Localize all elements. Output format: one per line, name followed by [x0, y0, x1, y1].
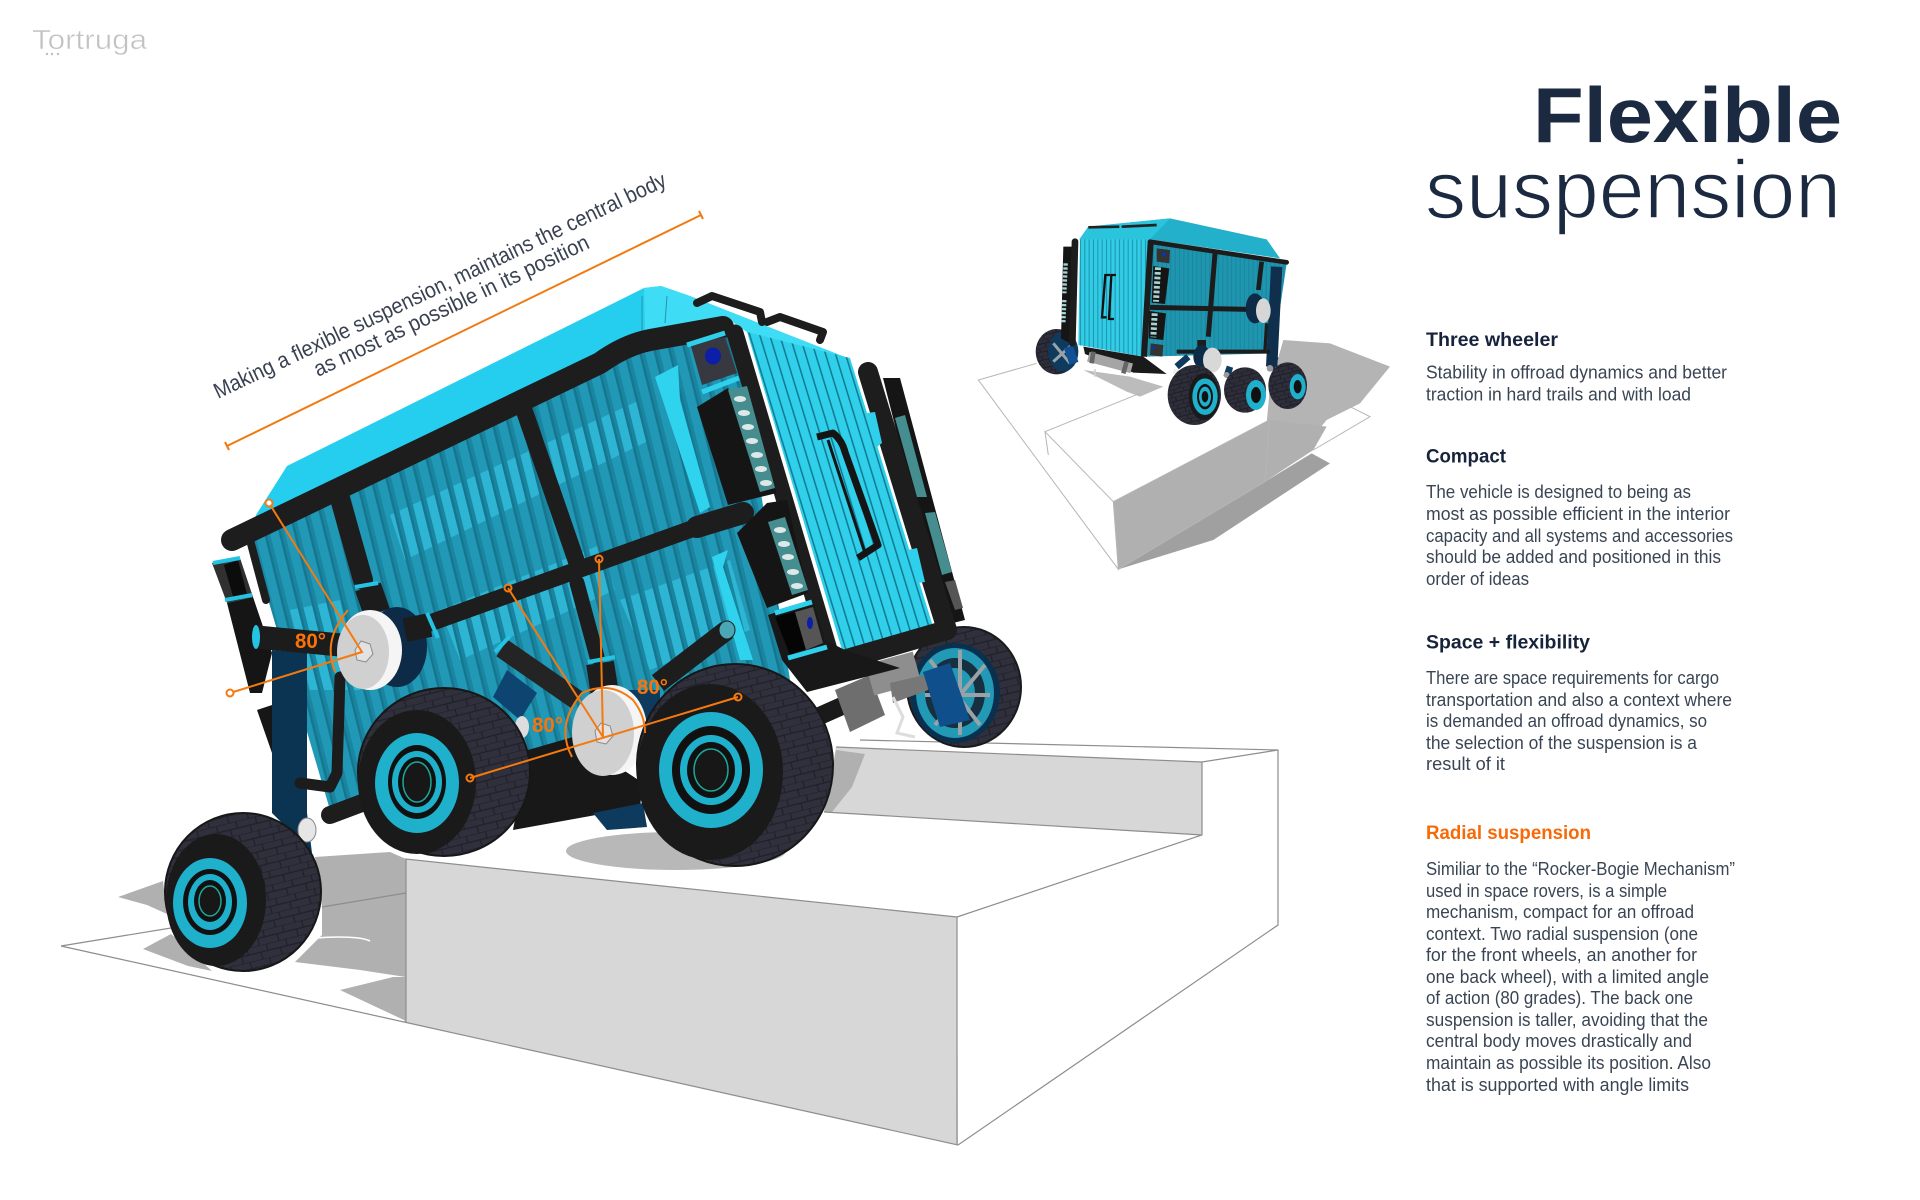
far side LED bars and tube: [867, 372, 965, 630]
text block: space + flexibility: result of it: [1426, 754, 1505, 774]
angle labels: 80°: [637, 676, 668, 699]
title: [1425, 71, 1842, 236]
roof: [250, 286, 850, 540]
text block: compact: capacity and all systems and accessories: [1426, 526, 1733, 546]
frame rails: [232, 327, 947, 815]
arrow: orange measure line: [225, 211, 703, 450]
text block: three wheeler: [1426, 329, 1727, 404]
callout: rotated caption: Making a flexible suspension, maintains the central body: [209, 167, 670, 404]
hubs: [1173, 293, 1275, 378]
text block: compact: should be added and positioned in this: [1426, 547, 1721, 567]
winch: [1083, 347, 1167, 377]
text block: radial suspension: of action (80 grades). The back one: [1426, 988, 1693, 1008]
text block: space + flexibility: is demanded an offroad dynamics, so: [1426, 711, 1707, 731]
text block: radial suspension: suspension is taller, avoiding that the: [1426, 1010, 1708, 1030]
logo: Tortruga: Tortruga: [32, 24, 147, 55]
text block: three wheeler: Three wheeler: [1426, 329, 1558, 351]
chart: stepped ground platform: [61, 740, 1278, 1145]
front wheel: [637, 664, 833, 866]
text block: radial suspension: maintain as possible its position. Also: [1426, 1053, 1711, 1073]
text block: three wheeler: Stability in offroad dynamics and better: [1426, 362, 1727, 382]
end panel with ribs: [747, 332, 935, 660]
rear radial suspension hub: [252, 583, 438, 690]
text block: compact: order of ideas: [1426, 569, 1529, 589]
text block: radial suspension: for the front wheels, an another for: [1426, 945, 1697, 965]
wheels: [1168, 362, 1307, 425]
text block: three wheeler: traction in hard trails and with load: [1426, 384, 1691, 404]
far side lights: [1061, 242, 1075, 343]
text block: compact: [1426, 446, 1733, 589]
icon: small vehicle: [1036, 218, 1307, 425]
title: Flexible: [1533, 71, 1842, 159]
title: suspension: [1425, 143, 1841, 236]
text block: compact: Compact: [1426, 446, 1506, 468]
icon: small vehicle steps: [978, 340, 1390, 569]
text block: radial suspension: mechanism, compact for an offroad: [1426, 902, 1694, 922]
icon: main vehicle: [165, 286, 1021, 971]
text block: space + flexibility: the selection of the suspension is a: [1426, 733, 1698, 753]
LED light bars: [687, 333, 900, 692]
rear right wheel and winch: [815, 627, 1021, 747]
left camera box and leg: [212, 558, 340, 853]
text block: space + flexibility: There are space requirements for cargo: [1426, 668, 1719, 688]
text block: compact: most as possible efficient in the interior: [1426, 504, 1730, 524]
angle labels: [295, 630, 668, 737]
callout: rotated caption: as most as possible in its position: [309, 229, 593, 382]
mid wheel: [358, 688, 530, 856]
angle guides: [226, 500, 742, 782]
side panel with ribs: [250, 325, 790, 810]
angle labels: 80°: [295, 630, 326, 653]
lower left wheel: [165, 813, 321, 971]
text block: space + flexibility: Space + flexibility: [1426, 632, 1590, 654]
front suspension arms and chassis: [493, 621, 735, 830]
text block: space + flexibility: [1426, 632, 1732, 774]
rear wheel: [1036, 329, 1078, 374]
body: [1078, 218, 1287, 367]
text block: radial suspension: used in space rovers, is a simple: [1426, 881, 1667, 901]
text block: radial suspension: one back wheel), with a limited angle: [1426, 967, 1709, 987]
text block: radial suspension: that is supported with angle limits: [1426, 1075, 1689, 1095]
text block: space + flexibility: transportation and also a context where: [1426, 690, 1732, 710]
text block: radial suspension: [1426, 822, 1735, 1095]
text block: radial suspension: central body moves drastically and: [1426, 1031, 1692, 1051]
angle labels: 80°: [532, 714, 563, 737]
text block: radial suspension: Similiar to the “Rocker-Bogie Mechanism”: [1426, 859, 1735, 879]
text block: radial suspension: context. Two radial suspension (one: [1426, 924, 1698, 944]
text block: radial suspension: Radial suspension: [1426, 822, 1591, 844]
text block: compact: The vehicle is designed to being as: [1426, 482, 1691, 502]
